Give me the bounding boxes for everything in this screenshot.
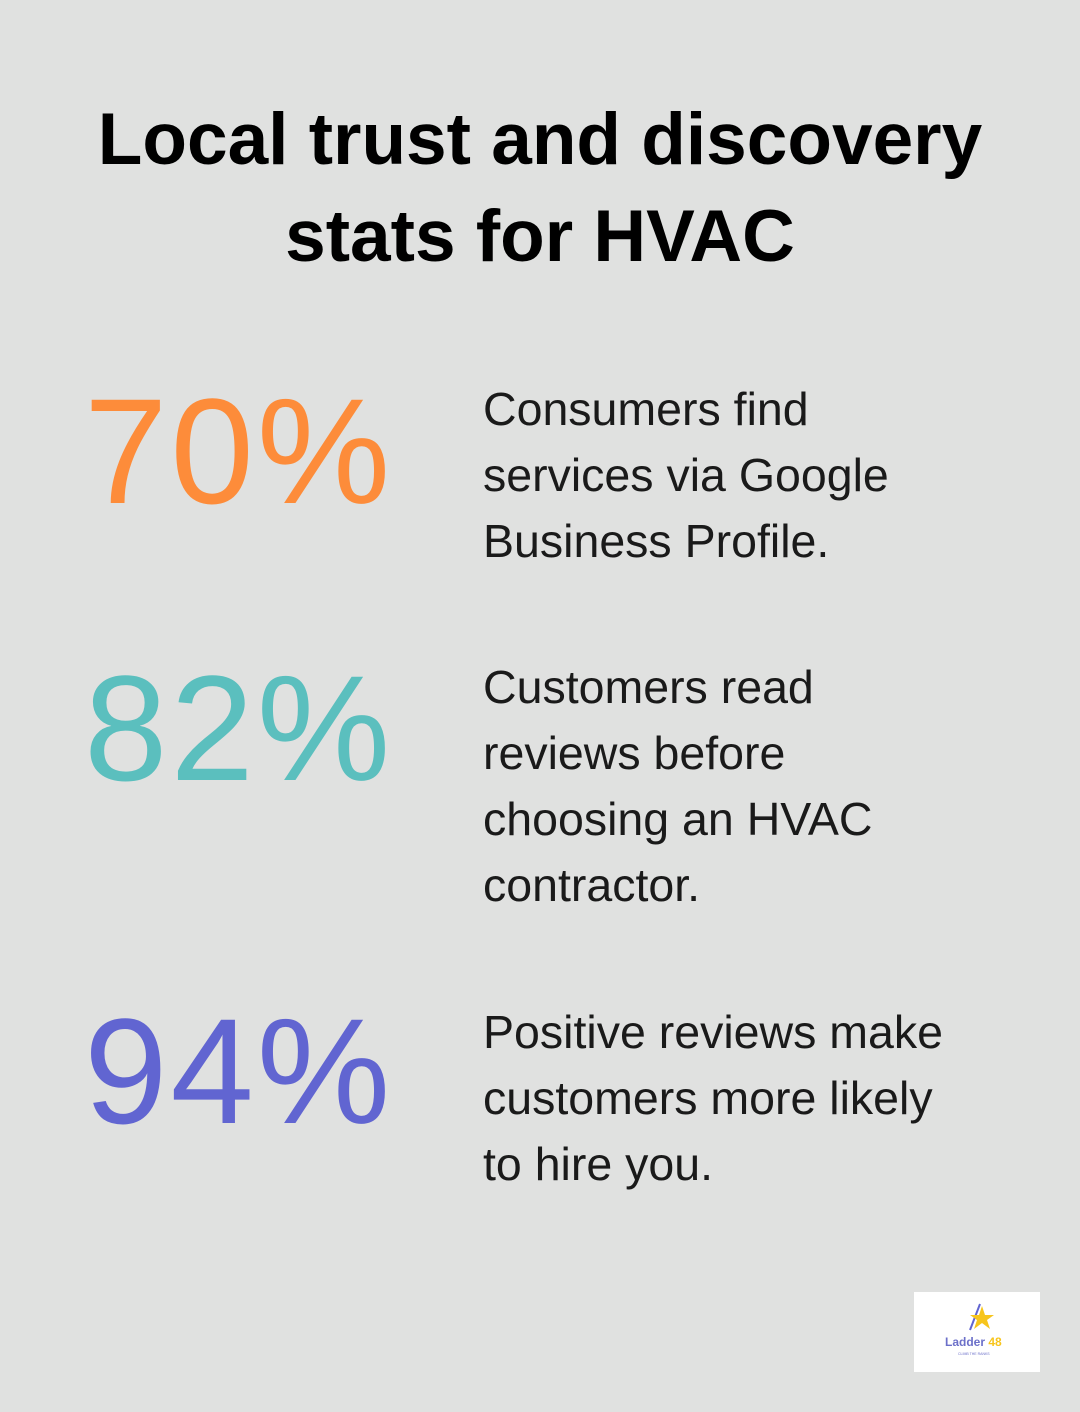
text: 94% description: customers more likely xyxy=(483,1072,933,1124)
icon: ladder star xyxy=(970,1304,994,1330)
text: 82% description xyxy=(483,661,872,911)
text: 70% description: services via Google xyxy=(483,449,889,501)
title: stats for HVAC xyxy=(285,196,795,277)
title: Local trust and discovery xyxy=(98,99,982,180)
logo: Ladder 48 xyxy=(914,1292,1040,1372)
text: 82% description: contractor. xyxy=(483,859,700,911)
stat: 94%: 94% xyxy=(84,987,393,1155)
text: 94% description: to hire you. xyxy=(483,1138,713,1190)
title xyxy=(98,99,982,277)
stat: 70%: 70% xyxy=(84,367,393,535)
text: 94% description: Positive reviews make xyxy=(483,1006,943,1058)
text: 94% description xyxy=(483,1006,943,1190)
text: 70% description: Consumers find xyxy=(483,383,809,435)
logo: Ladder 48: CLIMB THE RANKS xyxy=(958,1352,990,1356)
text: 82% description: choosing an HVAC xyxy=(483,793,872,845)
text: 82% description: Customers read xyxy=(483,661,814,713)
stat: 82%: 82% xyxy=(84,644,393,812)
text: 70% description: Business Profile. xyxy=(483,515,829,567)
logo text: Ladder 48 xyxy=(945,1335,1002,1349)
text: 82% description: reviews before xyxy=(483,727,785,779)
text: 70% description xyxy=(483,383,889,567)
